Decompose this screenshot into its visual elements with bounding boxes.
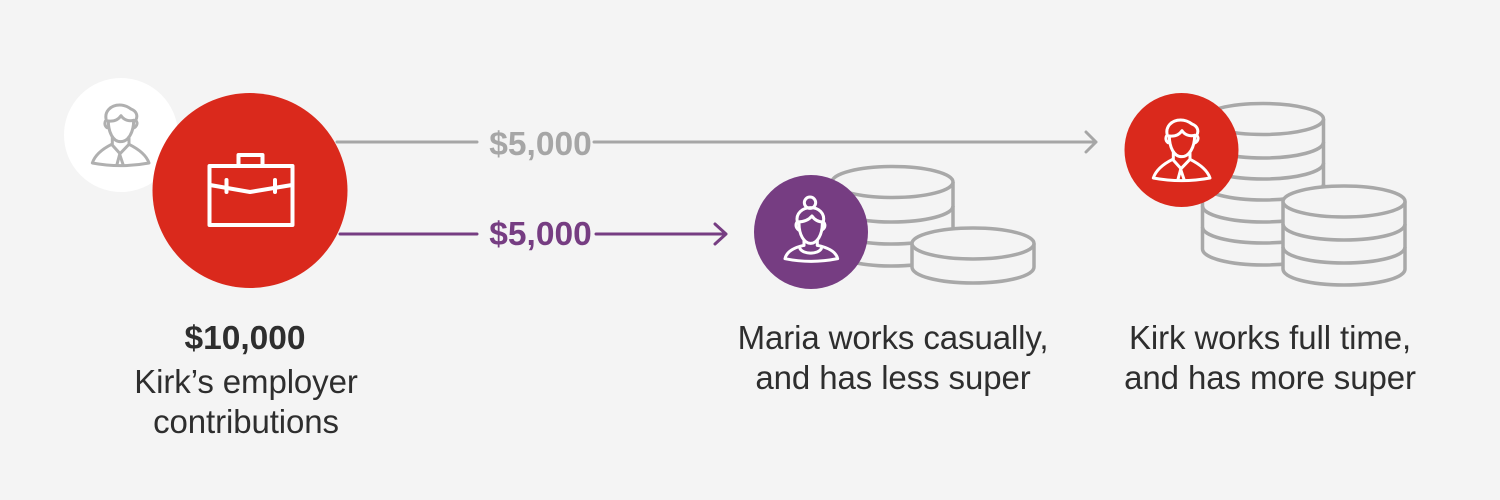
caption: Kirk: and has more super <box>1124 359 1416 396</box>
amount label: grey $5,000: $5,000 <box>489 126 592 163</box>
caption: Maria <box>738 319 1048 396</box>
icon: Maria in purple circle <box>754 175 868 289</box>
icon: employer circle with briefcase <box>152 93 348 288</box>
icon: Kirk in red circle <box>1124 93 1238 207</box>
caption: Kirk: Kirk works full time, <box>1129 319 1411 356</box>
caption: Kirk <box>1124 319 1416 396</box>
purple arrow to Maria <box>340 224 726 244</box>
caption: employer contributions: Kirk’s employer <box>134 363 358 400</box>
grey arrow to Kirk <box>337 132 1096 152</box>
Maria front coin <box>912 228 1034 283</box>
icon: Kirk in white circle <box>64 78 178 192</box>
Kirk back coin stack <box>1202 104 1324 265</box>
Maria back coin stack <box>832 166 953 266</box>
Kirk front coin stack <box>1283 186 1405 285</box>
caption: employer contributions <box>134 320 358 440</box>
caption: employer contributions: $10,000 <box>184 320 306 357</box>
amount label: purple $5,000: $5,000 <box>489 216 592 253</box>
caption: Maria: Maria works casually, <box>738 319 1048 356</box>
caption: Maria: and has less super <box>755 359 1031 396</box>
caption: employer contributions: contributions <box>153 403 339 440</box>
